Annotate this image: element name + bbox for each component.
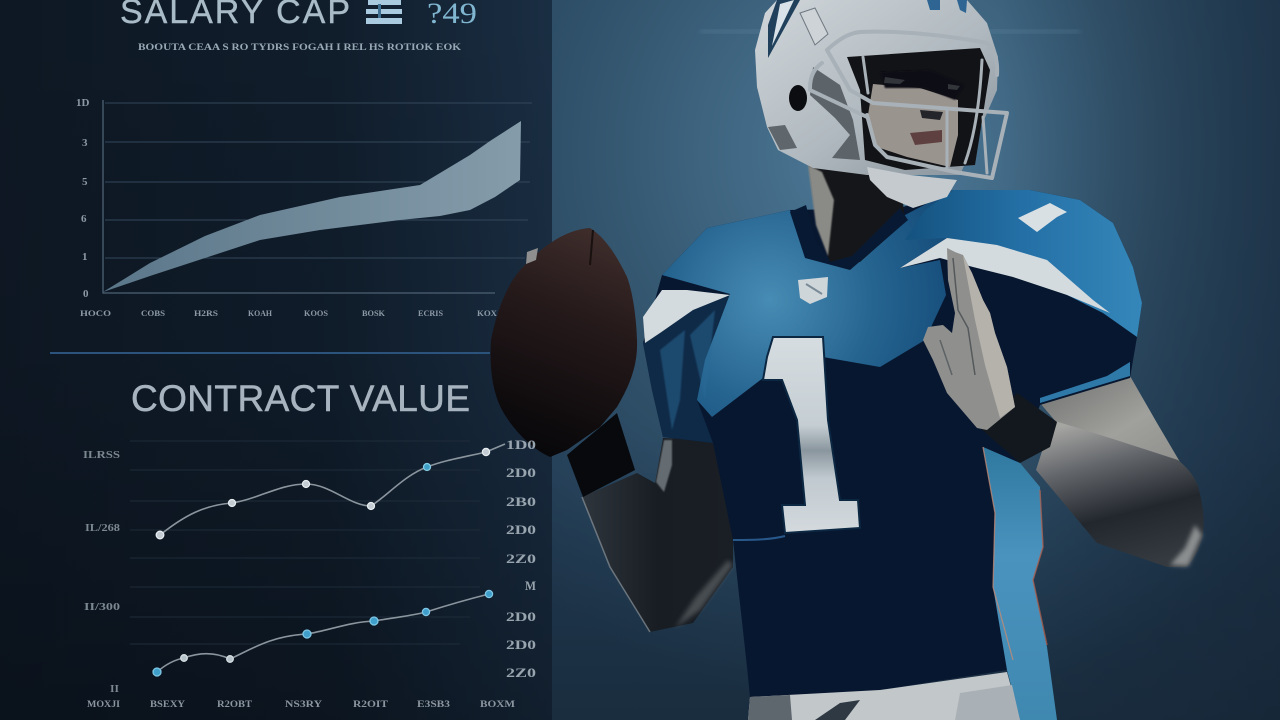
left axis labels: II (110, 683, 119, 695)
helmet clip (800, 8, 828, 45)
bottom axis labels (87, 700, 515, 710)
right axis labels: 2D0 (506, 637, 536, 652)
top stripe (927, 0, 967, 13)
right shoulder (905, 190, 1142, 337)
bottom axis labels: NS3RY (285, 700, 322, 710)
right arm (1036, 376, 1204, 567)
right axis labels: 2B0 (506, 494, 536, 509)
bottom axis labels: R2OIT (353, 700, 389, 710)
collar (790, 205, 908, 270)
left axis labels: ILRSS (83, 449, 120, 461)
icon: stacked bars (366, 0, 402, 24)
wristband right (980, 393, 1057, 463)
upper arm (1040, 376, 1180, 462)
x axis labels: H2RS (194, 308, 218, 318)
sleeve number (1018, 203, 1067, 232)
neck (808, 160, 905, 262)
left sleeve (643, 294, 730, 443)
panel: salary cap (76, 0, 532, 318)
y axis labels: 3 (82, 137, 88, 149)
face opening (847, 48, 990, 170)
x axis labels: KOAH (248, 308, 272, 318)
right axis labels: 2D0 (506, 609, 536, 624)
x axis labels: BOSK (362, 308, 385, 318)
series: upper line (156, 444, 505, 539)
cheek cavity (810, 67, 860, 160)
forearm (1036, 420, 1204, 567)
right axis labels: 2D0 (506, 522, 536, 537)
pants (748, 672, 1020, 720)
chin strap (867, 167, 957, 208)
bottom axis labels: BSEXY (150, 700, 185, 710)
subtitle: BOOUTA CEAA S RO TYDRS FOGAH I REL HS ROTIOK EOK (138, 43, 462, 53)
y axis labels: 5 (82, 176, 88, 188)
jersey number 1 (763, 337, 860, 533)
y axis labels (76, 97, 90, 300)
bottom axis labels: R2OBT (217, 700, 253, 710)
right sleeve cuff (1040, 362, 1130, 403)
helmet (755, 0, 1007, 208)
y axis labels: 0 (83, 288, 89, 300)
x axis labels: KOOS (304, 308, 328, 318)
line chart: contract value (83, 441, 515, 710)
side panel (983, 447, 1057, 720)
area chart: salary cap (76, 97, 532, 318)
bottom axis labels: MOXJI (87, 700, 120, 710)
face (868, 70, 965, 167)
right axis labels: 2Z0 (506, 665, 536, 680)
football (491, 228, 637, 457)
x axis labels (80, 308, 498, 318)
player illustration (491, 0, 1204, 720)
y axis labels: 1 (82, 251, 88, 263)
divider (50, 352, 490, 354)
jaw clip (768, 125, 797, 150)
right axis labels: 2D0 (506, 465, 536, 480)
x axis labels: ECRIS (418, 308, 443, 318)
shoulder stripes (643, 238, 1110, 343)
bottom axis labels: E3SB3 (417, 700, 450, 710)
left axis labels (83, 449, 121, 695)
jersey torso (643, 190, 1142, 697)
jersey logo (798, 277, 828, 304)
x axis labels: COBS (141, 308, 165, 318)
wristband left (567, 413, 635, 497)
series: lower line (153, 590, 493, 676)
left axis labels: II/300 (84, 601, 121, 613)
hem trim (733, 536, 785, 540)
chest light (662, 190, 1000, 417)
x axis labels: KOX (477, 308, 498, 318)
heading: contract value: CONTRACT VALUE (131, 378, 470, 419)
right axis labels: M (525, 578, 536, 593)
earhole (789, 85, 807, 111)
right axis labels: 1D0 (506, 437, 536, 452)
helmet shell (755, 0, 998, 175)
left axis labels: IL/268 (85, 522, 121, 534)
x axis labels: HOCO (80, 308, 111, 318)
helmet logo (768, 0, 800, 58)
hand (923, 248, 1015, 430)
y axis labels: 1D (76, 97, 90, 109)
bottom axis labels: BOXM (480, 700, 515, 710)
y axis labels: 6 (81, 213, 87, 225)
right axis labels: 2Z0 (506, 551, 536, 566)
panel: contract value (83, 378, 515, 710)
right axis labels (506, 437, 536, 680)
left arm (582, 438, 733, 632)
facemask (810, 32, 1007, 178)
